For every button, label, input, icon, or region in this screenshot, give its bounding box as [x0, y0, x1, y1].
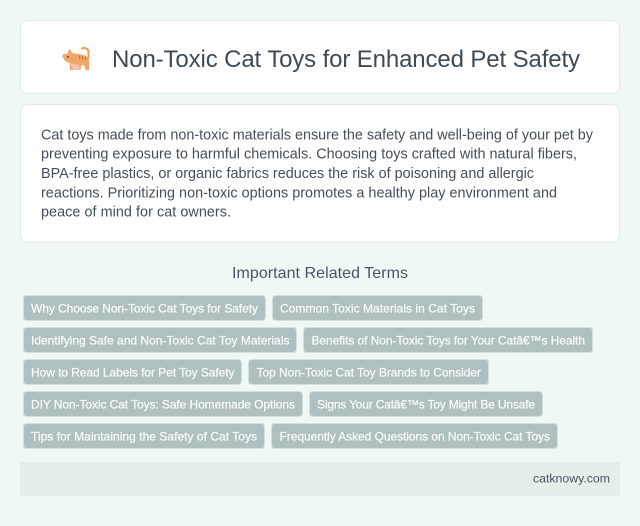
tag — [24, 360, 242, 384]
tag — [24, 392, 302, 416]
tag: Signs Your Catâ€™s Toy Might Be Unsafe — [317, 397, 535, 411]
tag: How to Read Labels for Pet Toy Safety — [31, 365, 234, 379]
heading: related terms: Important Related Terms — [232, 265, 408, 282]
title: Non-Toxic Cat Toys for Enhanced Pet Safety — [112, 46, 580, 73]
footer source text: catknowy.com — [533, 472, 610, 486]
text block: description: peace of mind for cat owners. — [41, 205, 231, 221]
panel: footer — [20, 462, 620, 496]
panel: related term tags — [24, 296, 592, 448]
panel: description card — [20, 104, 620, 242]
tag — [310, 392, 542, 416]
tag — [24, 424, 264, 448]
text block: description: reactions. Prioritizing non-toxic options promotes a healthy play environment and — [41, 185, 557, 201]
tag — [272, 296, 482, 320]
tag: Why Choose Non-Toxic Cat Toys for Safety — [31, 301, 258, 315]
tag — [304, 328, 592, 352]
tag — [248, 360, 488, 384]
text block: description — [41, 127, 594, 221]
icon: cat — [62, 48, 89, 70]
tag: DIY Non-Toxic Cat Toys: Safe Homemade Options — [31, 397, 295, 411]
text block: description: BPA-free plastics, or organic fabrics reduces the risk of poisoning and allergic — [41, 166, 534, 182]
tag: Top Non-Toxic Cat Toy Brands to Consider — [256, 365, 481, 379]
text block: description: Cat toys made from non-toxic materials ensure the safety and well-being of your pet by — [41, 127, 594, 143]
panel: header card — [20, 20, 620, 94]
tag: Frequently Asked Questions on Non-Toxic Cat Toys — [280, 429, 550, 443]
tag: Common Toxic Materials in Cat Toys — [280, 301, 475, 315]
tag: Identifying Safe and Non-Toxic Cat Toy Materials — [31, 333, 290, 347]
tag — [24, 296, 266, 320]
tag: Tips for Maintaining the Safety of Cat Toys — [31, 429, 257, 443]
tag: Benefits of Non-Toxic Toys for Your Catâ€™s Health — [312, 333, 585, 347]
text block: description: preventing exposure to harmful chemicals. Choosing toys crafted with natural fibers, — [41, 147, 577, 163]
tag — [24, 328, 296, 352]
tag — [272, 424, 558, 448]
